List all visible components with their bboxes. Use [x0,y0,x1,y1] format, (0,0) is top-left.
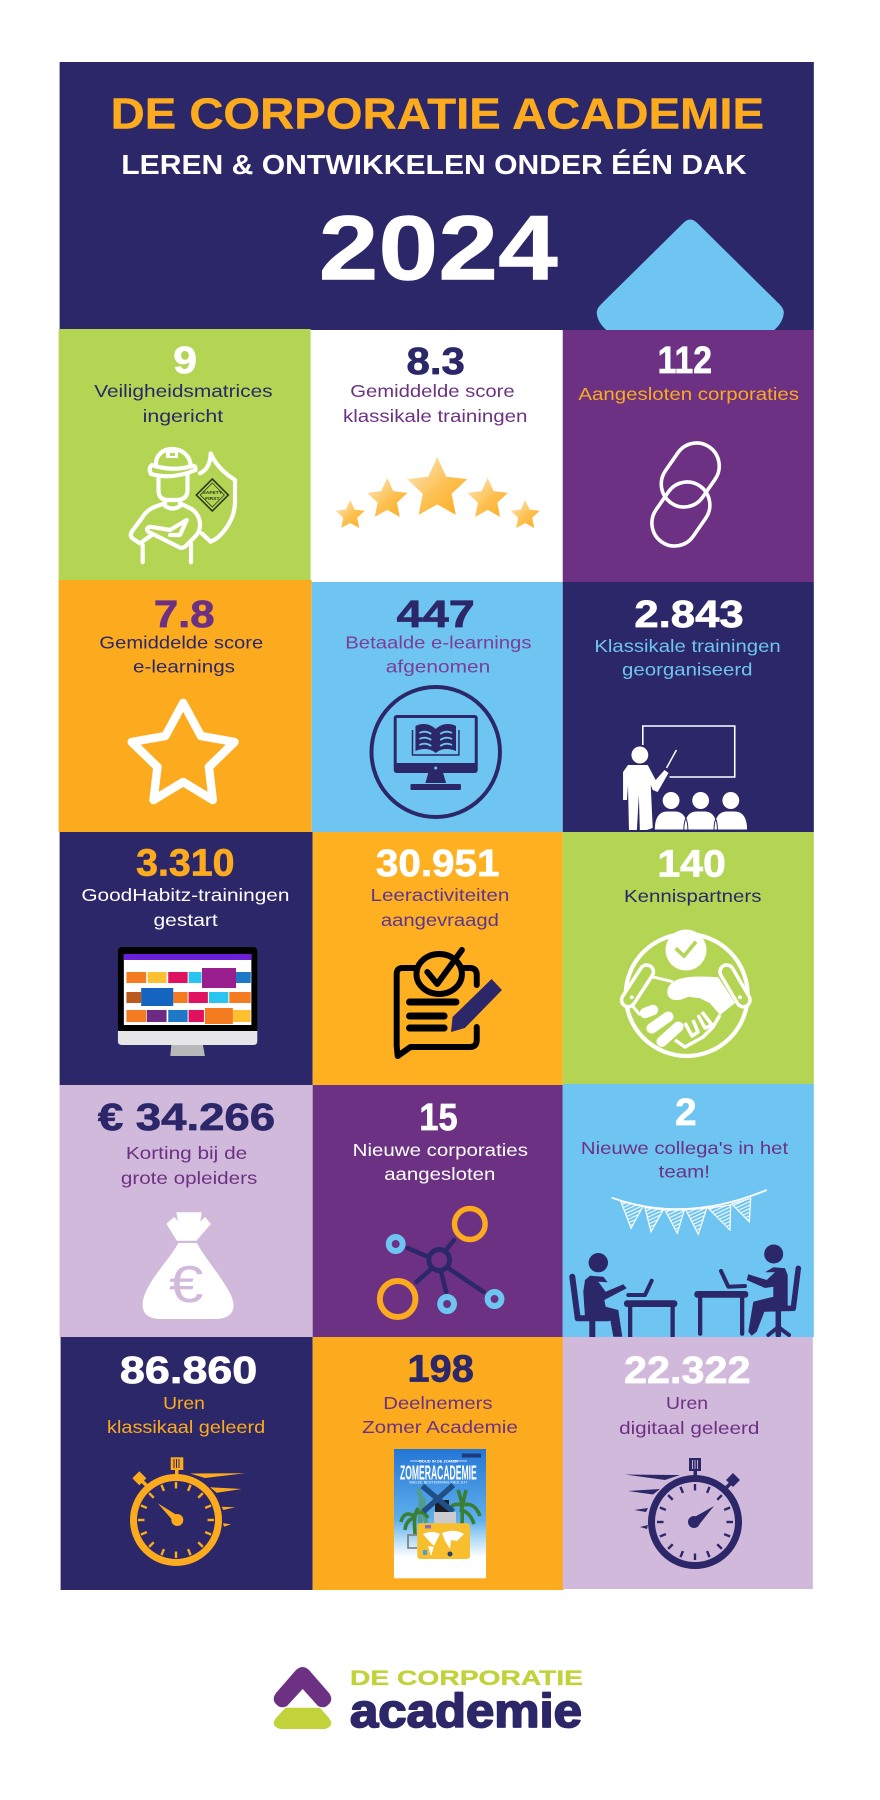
image: zomeracademie poster: GOUD IN DE ZOMER [419,1458,458,1464]
label: Uren [163,1393,205,1413]
label: Nieuwe collega's in het [581,1138,788,1158]
icon: chain links [643,434,728,555]
panel: uren klassikaal [61,1337,313,1590]
number: 2 [675,1092,697,1134]
panel: betaalde e-learnings [312,582,563,832]
icon: bunting [612,1190,767,1234]
icon: network [380,1208,501,1317]
number: 15 [419,1097,458,1139]
label: Leeractiviteiten [370,885,509,905]
panel: zomer academie: ZOMERACADEMIE [400,1462,477,1484]
logo text: DE CORPORATIE [350,1667,583,1690]
label: Klassikale trainingen [594,636,781,656]
number: 198 [408,1349,474,1391]
label: Gemiddelde score [350,381,515,401]
image: zomeracademie poster: WELKE BESTEMMING KIES JIJ? [409,1480,467,1485]
label: Nieuwe corporaties [353,1140,528,1160]
number: 112 [658,340,712,382]
label: gestart [154,910,218,930]
label: aangesloten [384,1164,495,1184]
number: 9 [173,340,197,382]
icon: computer screen [118,947,257,1056]
label: grote opleiders [121,1168,257,1188]
number: 22.322 [624,1350,751,1392]
icon: handshake [626,930,748,1056]
label: Korting bij de [126,1143,247,1163]
panel: uren digitaal [563,1337,813,1589]
icon: money bag: € [169,1255,204,1313]
panel: nieuwe corporaties [313,1085,563,1337]
title: DE CORPORATIE ACADEMIE [111,89,764,139]
number: 140 [657,844,726,886]
icon: five stars [336,457,540,528]
number: 3.310 [136,843,235,885]
icon: stopwatch navy [625,1458,740,1566]
icon: teacher and students [623,726,748,830]
icon: star outline [132,703,235,800]
label: aangevraagd [381,910,499,930]
icon: stopwatch orange [132,1457,245,1562]
year: 2024 [319,197,558,300]
number: 30.951 [376,843,499,885]
icon: safety first sign [196,479,228,511]
label: afgenomen [386,657,490,677]
panel: goodhabitz [60,832,313,1085]
number: 447 [397,594,475,636]
icon: money bag [143,1213,234,1319]
label: Gemiddelde score [99,633,263,653]
image: zomeracademie poster [394,1449,486,1578]
number: 2.843 [634,594,744,636]
panel: zomer academie [313,1337,564,1590]
number: € 34.266 [98,1097,275,1139]
icon: safety worker [131,449,235,562]
label: Zomer Academie [362,1417,518,1437]
label: Deelnemers [383,1393,493,1413]
icon: safety first sign: SAFETY [202,490,223,496]
panel: nieuwe collega's [563,1084,814,1337]
icon: checklist and pencil [397,950,502,1056]
label: georganiseerd [622,660,753,680]
label: digitaal geleerd [619,1418,759,1438]
panel: kennispartners [563,832,814,1084]
label: klassikale trainingen [343,406,527,426]
icon: safety first sign: FIRST [205,496,220,502]
panel: klassikale score [311,330,563,582]
label: klassikaal geleerd [107,1417,265,1437]
label: Kennispartners [624,886,761,906]
panel: leeractiviteiten [313,832,563,1085]
label: Betaalde e-learnings [345,633,532,653]
label: ingericht [143,406,223,426]
number: 8.3 [407,341,465,383]
icon: monitor with book [371,687,500,817]
label: e-learnings [133,657,235,677]
panel: header [60,62,814,330]
label: Veiligheidsmatrices [94,381,273,401]
subtitle: LEREN & ONTWIKKELEN ONDER ÉÉN DAK [121,149,747,180]
label: team! [659,1162,710,1182]
label: Uren [666,1393,708,1413]
icon: two colleagues at desks [572,1244,798,1337]
panel: korting [60,1085,313,1337]
logo wordmark: academie [350,1684,582,1737]
label: Aangesloten corporaties [578,384,799,404]
icon: roof triangle [597,220,784,330]
icon: logo house [274,1667,331,1729]
panel: veiligheidsmatrices [59,329,311,580]
panel: e-learning score [59,580,312,832]
logo [274,1667,583,1737]
number: 7.8 [154,594,215,636]
label: GoodHabitz-trainingen [81,885,289,905]
panel: klassikale trainingen [563,582,814,832]
panel: aangesloten corporaties [563,330,814,582]
number: 86.860 [120,1350,257,1392]
